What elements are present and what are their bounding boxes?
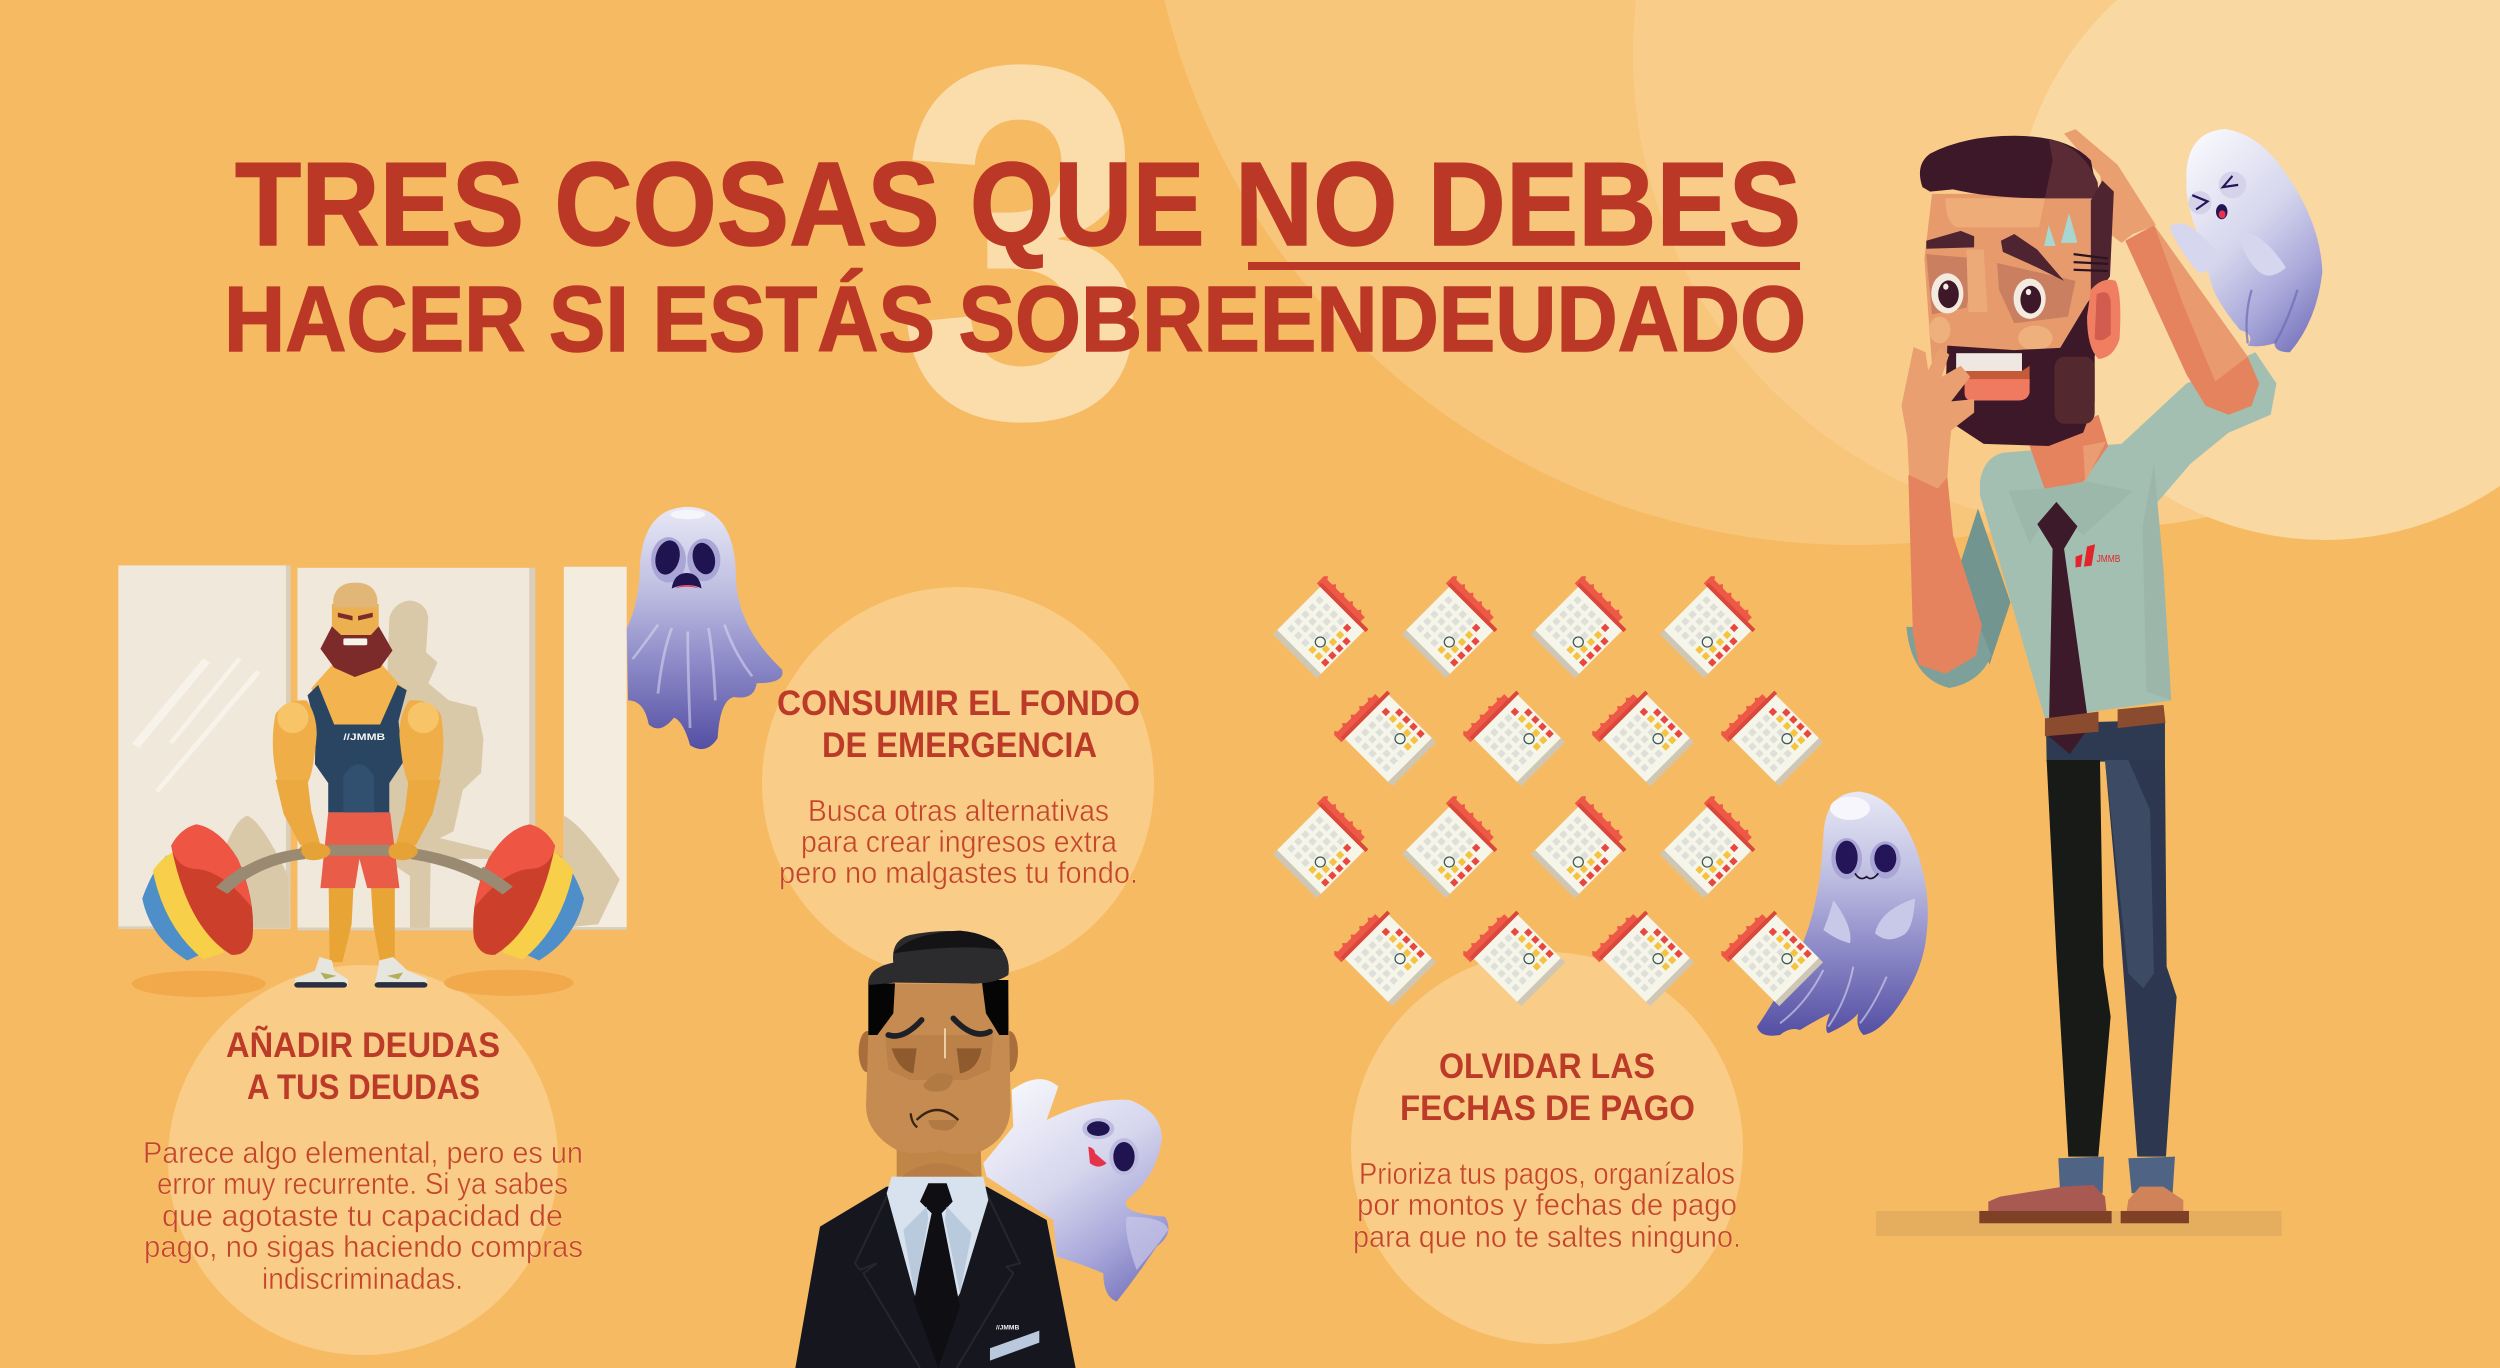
text block: consumir el fondo [777, 684, 1140, 890]
ghost: smiling, next to calendars [1757, 792, 1928, 1036]
calendar row 4 [1332, 904, 1824, 1010]
calendar row 2 [1332, 684, 1824, 790]
calendars grid [1269, 574, 1824, 1010]
heading: OLVIDAR LAS [1439, 1047, 1655, 1086]
illustration: worried man legs [1876, 720, 2282, 1236]
left upper arm [1961, 509, 2010, 665]
head [1920, 129, 2156, 446]
floor shadows [132, 971, 266, 997]
text block: añadir deudas [143, 1026, 583, 1296]
illustration: businessman with ghost [795, 931, 1168, 1368]
background circle: light [2015, 0, 2500, 540]
background circle: medium [1633, 0, 2500, 528]
trousers [2046, 720, 2165, 762]
body [143, 1135, 583, 1296]
raised sleeve [2121, 352, 2276, 504]
eyebrows [1926, 231, 2064, 281]
ear [2087, 280, 2120, 359]
weight plates left [142, 824, 253, 960]
hair [1920, 136, 2099, 198]
heading [226, 1026, 500, 1107]
lifter body: //JMMB [343, 732, 386, 743]
body: indiscriminadas. [262, 1261, 463, 1296]
shirt collar and tie: //JMMB [996, 1324, 1019, 1331]
title line 2: HACER SI ESTÁS SOBREENDEUDADO [224, 267, 1806, 371]
panel: circle middle [762, 587, 1154, 979]
body: Busca otras alternativas [808, 793, 1109, 828]
shirt torso [1980, 444, 2171, 718]
illustration: worried man upper body [1901, 129, 2276, 754]
body [1353, 1156, 1741, 1254]
body: pago, no sigas haciendo compras [144, 1229, 583, 1264]
heading: DE EMERGENCIA [822, 726, 1097, 765]
floor shadow [1876, 1211, 2282, 1236]
gym windows [118, 565, 627, 930]
logo: JMMB [2097, 554, 2120, 564]
title line 1: TRES COSAS QUE NO DEBES [235, 138, 1801, 271]
body [779, 793, 1138, 890]
heading [777, 684, 1140, 765]
left forearm [1906, 475, 1991, 688]
face [1924, 194, 2095, 366]
neck [2030, 415, 2108, 490]
panel: circle right [1351, 952, 1743, 1344]
body: por montos y fechas de pago [1357, 1187, 1737, 1222]
eyes [1931, 273, 2046, 319]
ghost: sad, next to gym [627, 507, 783, 749]
beard [1945, 276, 2106, 446]
heading: AÑADIR DEUDAS [226, 1026, 500, 1065]
text block: olvidar las fechas [1353, 1047, 1741, 1254]
background circle: large [1145, 0, 2500, 545]
collar [2009, 482, 2133, 544]
hand over mouth [1901, 347, 1974, 488]
body: para crear ingresos extra [801, 824, 1118, 859]
calendar row 3 [1269, 794, 1762, 899]
heading: A TUS DEUDAS [247, 1068, 480, 1107]
weight plates right [473, 824, 584, 960]
body: para que no te saltes ninguno. [1353, 1219, 1741, 1254]
title underline [1248, 262, 1800, 270]
hair [868, 931, 1009, 1035]
wall shadows [222, 601, 620, 928]
head [859, 983, 1018, 1177]
body: Prioriza tus pagos, organízalos [1359, 1156, 1735, 1191]
body: pero no malgastes tu fondo. [779, 855, 1138, 890]
illustration: weightlifter in gym [118, 565, 627, 997]
raised forearm [2125, 225, 2259, 415]
panel: circle left [168, 965, 558, 1355]
heading: FECHAS DE PAGO [1400, 1089, 1695, 1128]
heading: CONSUMIR EL FONDO [777, 684, 1140, 723]
body: Parece algo elemental, pero es un [143, 1135, 583, 1170]
ghost: on shoulder [2169, 129, 2322, 352]
heading [1400, 1047, 1695, 1128]
shoes [1988, 1185, 2107, 1213]
suit [795, 1187, 1076, 1368]
title [224, 138, 1806, 371]
sideburn [2091, 180, 2114, 303]
body: que agotaste tu capacidad de [162, 1198, 563, 1233]
lifter body [273, 583, 443, 988]
belt [2045, 705, 2165, 736]
socks [2058, 1157, 2175, 1193]
mouth [1956, 353, 2030, 401]
tie [2037, 502, 2089, 754]
shirt collar and tie [887, 1177, 1039, 1368]
ghost: behind shoulder [983, 1079, 1168, 1302]
body: error muy recurrente. Si ya sabes [157, 1166, 568, 1201]
hand on head [2064, 129, 2156, 243]
barbell [142, 824, 584, 960]
logo [2076, 544, 2120, 567]
sweat drops [2044, 213, 2077, 246]
calendar row 1 [1269, 574, 1762, 679]
